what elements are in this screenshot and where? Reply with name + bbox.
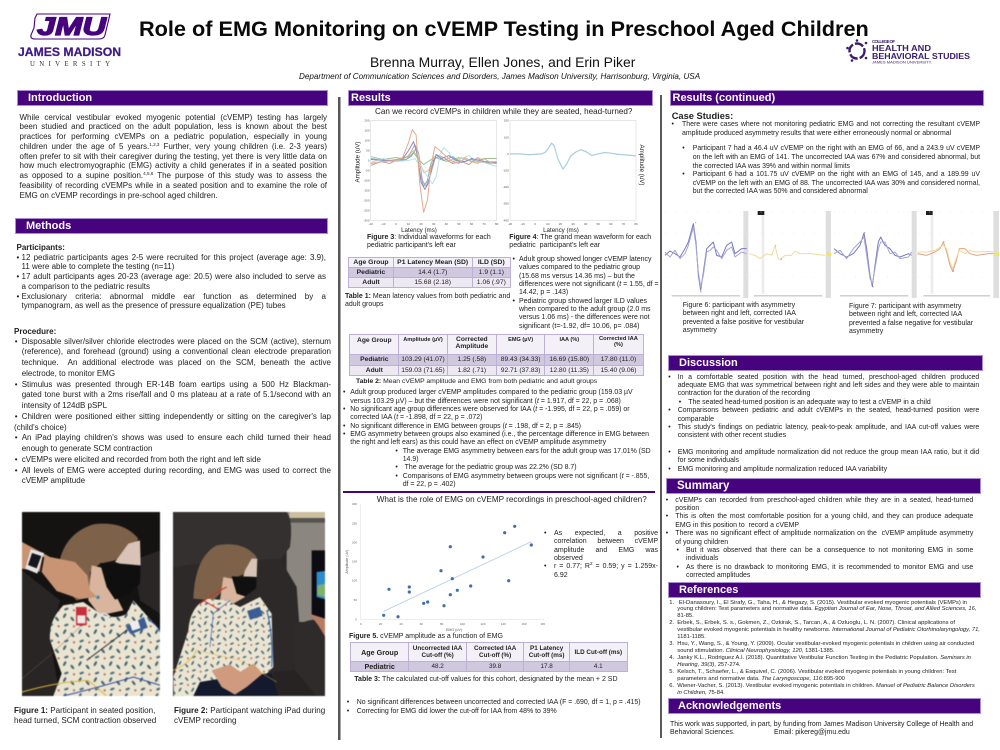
bullets: case studies: amplitude produced asymmetry results that were either erroneously normal or abnormal (682, 130, 951, 137)
table 2: amplitude and EMG: IAA (%) (559, 337, 579, 343)
bullets: summary: corrected amplitudes (686, 572, 750, 579)
table 1: latency: Pediatric (357, 269, 385, 276)
table 2: amplitude and EMG: 89.43 (34.33) (501, 356, 541, 363)
bullets: amplitude and EMG findings: No significant age group differences were observed for IAA (t = -1.995, df = 22, p = .059) or (350, 406, 630, 413)
chart: figures 6 and 7 case waveforms: N (872, 286, 874, 288)
text: procedure: gated tone burst with a 2ms rise/fall and 0 ms plateau at a rate of 5.1/second with an (22, 390, 331, 399)
chart: figure 4 grand mean waveform: Latency (ms) (543, 227, 579, 234)
caption: figure 3: Figure 3: Individual waveforms for each (367, 234, 491, 240)
bullets: summary: But it was observed that there can be a consequence to not monitoring EMG in some (686, 547, 973, 554)
bullets: summary: position (675, 505, 699, 512)
caption: figure 6: between right and left, corrected IAA (683, 310, 796, 317)
chart: figure 4 grand mean waveform: -400 (503, 218, 509, 222)
text: procedure: (reference), and forehead (ground) using a conventional clean electrode preparation (22, 347, 331, 356)
chart: figure 4 grand mean waveform: 30 (571, 222, 575, 226)
caption: table 2: Table 2: Mean cVEMP amplitude and EMG from both pediatric and adult groups (356, 378, 597, 384)
caption: figure 1 (14, 706, 156, 725)
heading: Methods (15, 218, 328, 234)
table 1: latency: P1 Latency Mean (SD) (397, 259, 468, 266)
bullets: summary: of young children (675, 539, 728, 546)
chart: figure 3 individual waveforms: 20 (419, 222, 423, 226)
chart: figure 5 scatter plot: 80 (440, 622, 444, 626)
text: references list: vestibular evoked myogenic potentials in healthy newborns. International Journal of Pediatric Otorhinolaryngology, 71, (677, 627, 980, 633)
chart: figure 5 scatter plot: 60 (420, 622, 423, 626)
caption: figure 2: cVEMP recording (174, 716, 236, 725)
chart: figure 3 individual waveforms: 0 (395, 222, 397, 226)
bullets: discussion: adequate EMG that was symmetrical between right and left sides and they were able to maintain (678, 382, 979, 389)
table 2: amplitude and EMG: 16.69 (15.80) (549, 356, 589, 363)
caption: figure 4 (509, 234, 651, 249)
chart: figure 3 individual waveforms: 200 (364, 119, 370, 123)
chart: figure 3 individual waveforms: -10 (381, 222, 386, 226)
table 3: cut-off values: Age Group (361, 648, 398, 657)
bullets: discussion: comparable (678, 416, 714, 423)
heading: Discussion: Discussion (679, 357, 738, 369)
text: acknowledgements: This work was supported, in part, by funding from James Madison University College of Health and (670, 721, 973, 728)
text: references list: Janky K.L., Rodriguez A.I. (2018). Quantitative Vestibular Function Testing in the Pediatric Population. Seminars in (677, 655, 971, 661)
text: participants (16, 243, 326, 310)
text: introduction paragraph: feasibility of recording cVEMPs while in a seated position and to examine the role of (20, 181, 327, 190)
table 1: latency: Adult (362, 279, 380, 286)
table 1: latency: Age Group (353, 259, 389, 266)
heading: Results (348, 90, 653, 106)
caption: table 1: adult groups (345, 301, 384, 308)
text: participants: 11 were able to complete the testing (n=11) (22, 262, 174, 271)
bullets: case studies: the corrected IAA was 39% and within normal limits (693, 163, 850, 170)
chart: figure 3 individual waveforms: 150 (364, 129, 370, 133)
bullets: summary (666, 496, 974, 579)
bullets: latency and ILD findings: significant (t=-1.92, df= 10.06, p= .084) (519, 323, 639, 330)
chart: figure 3 individual waveforms: 80 (495, 222, 499, 226)
text: acknowledgements: Behavioral Sciences. (670, 729, 735, 736)
bullets: discussion: consistent with other recent studies (678, 432, 786, 439)
chart: figure 3 individual waveforms: -200 (363, 198, 370, 202)
table 2: amplitude and EMG: Amplitude (µV) (403, 337, 443, 343)
chart: figure 4 grand mean waveform: Amplitude (uV) (638, 145, 645, 185)
heading: Introduction (17, 90, 328, 106)
logo: College of Health and Behavioral Studies: JAMES MADISON UNIVERSITY. (872, 60, 932, 64)
bullets: amplitude and EMG findings: df = 22, p = .402) (403, 481, 456, 488)
table 2: amplitude and EMG: 1.82 (.71) (458, 367, 486, 374)
chart: figures 6 and 7 case waveforms: P (864, 232, 866, 234)
heading: Results continued: Results (continued) (672, 92, 775, 104)
text: acknowledgements: Email: pikereg@jmu.edu (774, 729, 850, 736)
bullets: correlation: 6.92 (554, 572, 568, 579)
logo: College of Health and Behavioral Studies: HEALTH AND (872, 44, 931, 53)
bullets: summary: individuals (686, 555, 718, 562)
bullets: latency and ILD findings: (15.68 ms versus 14.36 ms) – but the (519, 273, 635, 280)
caption: table 3: Table 3: The calculated cut-off values for this cohort, designated by the mean + 2 SD (354, 676, 618, 682)
table 1: latency (348, 257, 511, 288)
affiliation: Department of Communication Sciences and Disorders, James Madison University, Harrisonburg, Virginia, USA (299, 72, 700, 81)
chart: figures 6 and 7 case waveforms: N (781, 259, 783, 261)
text: references list: 1181-1185. (677, 634, 706, 640)
table 2: amplitude and EMG: 1.25 (.58) (458, 356, 486, 363)
chart: figure 4 grand mean waveform: 50 (597, 222, 600, 226)
question: seated head-turned: Can we record cVEMPs in children while they are seated, head-turned? (375, 107, 632, 116)
caption: figure 4: Figure 4: The grand mean waveform for each (509, 234, 651, 240)
heading: Case Studies: Case Studies: (672, 111, 733, 121)
bullets: latency and ILD findings: Pediatric group showed larger ILD values (519, 298, 647, 305)
table 1: latency: 14.4 (1.7) (418, 269, 447, 276)
chart: figure 4 grand mean waveform: 60 (609, 222, 613, 226)
table 3: cut-off values: 17.8 (540, 663, 553, 670)
bullets: discussion: In a comfortable seated position with the head turned, preschool-aged children produced (678, 374, 979, 381)
logo: College of Health and Behavioral Studies: BEHAVIORAL STUDIES (872, 52, 971, 61)
chart: figure 3 individual waveforms: -20 (369, 222, 373, 226)
chart: figure 5 scatter plot: 100 (460, 622, 465, 626)
table 1: latency: ILD (SD) (478, 259, 505, 266)
caption: figure 7 (849, 302, 973, 335)
text: 3. (669, 641, 674, 647)
bullets: discussion: Comparisons between pediatric and adult cVEMPs in the seated, head-turned position were (678, 407, 979, 414)
logo: JMU James Madison University: UNIVERSITY (30, 61, 110, 68)
bullets: amplitude and EMG findings: The average EMG asymmetry between ears for the adult group was 17.01% (SD (403, 448, 651, 455)
text: introduction paragraph: often prefer to sit with their caregiver during the testing, yet there is very little data on (20, 152, 327, 160)
chart: figure 4 grand mean waveform: -20 (508, 222, 512, 226)
bullets: case studies: Participant 6 had a 101.75 uV cVEMP on the right with an EMG of 145, and a 189.99 uV (693, 171, 980, 178)
chart: figure 5 scatter plot: 20 (379, 622, 383, 626)
text: references list: Hsu, Y., Wang, S., & Young, Y. (2009). Ocular vestibular-evoked myogenic potentials in children using air conducted (677, 641, 974, 647)
caption: figure 2 (174, 706, 325, 725)
text: introduction paragraph: how much electromyographic (EMG) activity a child generates if in a seated position (20, 161, 327, 170)
bullets: latency and ILD findings (512, 256, 659, 330)
bullets: case studies (672, 120, 980, 195)
text: references list: Erbek, S., Erbek, S. s., Gokmen, Z., Ozkirak, S., Tarcan, A., & Ozluoglu, L. N. (2007). Clinical applications of (677, 620, 955, 626)
text: procedure: technique. An additional electrode was placed on the SCM, beneath the active (22, 358, 331, 367)
chart: figures 6 and 7 case waveforms: N (953, 271, 955, 273)
table 3: cut-off values: 4.1 (594, 663, 603, 670)
table 2: amplitude and EMG: 12.80 (11.35) (550, 367, 589, 374)
chart: figure 4 grand mean waveform: -100 (503, 168, 509, 172)
table 3: cut-off values (350, 642, 628, 672)
table 2: amplitude and EMG: 92.71 (37.83) (501, 367, 541, 374)
caption: table 1: Table 1: Mean latency values from both pediatric and (345, 292, 510, 300)
bullets: amplitude and EMG findings: Comparisons of EMG asymmetry between groups were not significant (t = -.855, (403, 473, 649, 480)
text: procedure: intensity of 124dB pSPL (22, 401, 107, 410)
heading: Summary (666, 478, 981, 494)
bullets: latency and ILD findings: when compared to the adult group (2.0 ms (519, 306, 651, 313)
bullets: correlation: amplitude and EMG was (554, 547, 658, 554)
text: 6. (669, 683, 674, 689)
text: procedure: Disposable silver/silver chloride electrodes were placed on the SCM (active), sternum (22, 336, 331, 346)
caption: figure 7: prevented a false negative for vestibular (849, 320, 973, 327)
text: references list: Hearing, 39(3), 257-274. (677, 662, 741, 668)
bullets: amplitude and EMG findings: the right and left ears) as this could have an effect on cVEMP amplitude asymmetry (350, 439, 606, 446)
chart: figure 3 individual waveforms: -300 (363, 218, 370, 222)
chart: figure 3 individual waveforms (354, 119, 499, 234)
bullets: amplitude and EMG findings: No significant difference in EMG between groups (t = .198, df = 2, p = .845) (350, 423, 581, 430)
photo: figure 1 participant seated, head turned (21, 511, 161, 697)
chart: figure 4 grand mean waveform: -200 (503, 185, 509, 189)
text: references list: in Children, 75-84. (677, 690, 725, 696)
table 3: cut-off values: ILD Cut-off (ms) (575, 649, 622, 656)
chart: figure 3 individual waveforms: Amplitude (uV) (354, 142, 362, 182)
chart: figure 4 grand mean waveform: 0 (507, 152, 509, 156)
bullets: discussion: contraction for the duration of the recording (678, 390, 810, 397)
logo: College of Health and Behavioral Studies (846, 39, 971, 64)
chart: figure 4 grand mean waveform: 70 (622, 222, 625, 226)
bullets: discussion: EMG monitoring and amplitude normalization did not reduce the group mean IAA ratio, but it did (678, 449, 979, 456)
chart: figure 3 individual waveforms: 100 (364, 139, 370, 143)
bullets: latency and ILD findings: 14.42, p = .143) (519, 289, 568, 296)
chart: figure 5 scatter plot: 0 (360, 622, 362, 626)
text: introduction paragraph: children under the age of 5 years.1,2,3 Further, very young children (i.e. 2-3 years) (20, 142, 327, 151)
table 2: amplitude and EMG (349, 334, 644, 376)
chart: figure 5 scatter plot: 160 (521, 622, 527, 626)
text: procedure: cVEMPs were elicited and recorded from both the right and left side (22, 455, 261, 464)
chart: figure 5 scatter plot (345, 502, 545, 632)
chart: figure 3 individual waveforms: -50 (365, 168, 370, 172)
logo: JMU James Madison University: JMU (37, 13, 107, 41)
heading: Acknowledgements (668, 698, 981, 714)
text: references list: Kelsch, T., Schaefer, L., & Esquivel, C. (2006). Vestibular evoked myogenic potentials in young children: Test (677, 669, 956, 675)
text: references list: Wiener-Vacher, S. (2013). Vestibular evoked myogenic potentials in children. Manuel of Pediatric Balance Disorders (677, 683, 975, 689)
table 2: amplitude and EMG: 159.03 (71.65) (401, 367, 445, 374)
question: role of EMG: What is the role of EMG on cVEMP recordings in preschool-aged children? (377, 495, 647, 504)
chart: figure 3 individual waveforms: -250 (363, 208, 370, 212)
chart: figure 3 individual waveforms: 0 (368, 158, 370, 162)
table 2: amplitude and EMG: 15.40 (9.06) (600, 367, 637, 374)
chart: figure 3 individual waveforms: -150 (363, 188, 370, 192)
text: introduction paragraph: EMG on cVEMP recordings in pre-school aged children. (20, 190, 218, 200)
caption: figure 1: head turned, SCM contraction observed (14, 716, 156, 725)
bullets: correlation: r = 0.77; R2 = 0.59; y = 1.259x- (554, 561, 658, 570)
chart: figure 4 grand mean waveform: -300 (503, 202, 509, 206)
table 2: amplitude and EMG: EMG (µV) (508, 337, 533, 343)
heading: References (668, 582, 981, 598)
chart: figures 6 and 7 case waveforms (665, 211, 999, 298)
heading: Results: Results (351, 92, 391, 104)
text: references list: 81-85. (677, 613, 694, 619)
bullets: IAA correction: No significant differences between uncorrected and corrected IAA (F = .690, df = 1, p = .415) (357, 699, 641, 706)
text: 4. (669, 655, 674, 661)
bullets: summary: EMG in this position to record a cVEMP (675, 522, 799, 529)
chart: figure 5 scatter plot: 250 (352, 521, 357, 525)
chart: figure 5 scatter plot: 50 (354, 598, 357, 602)
chart: figure 4 grand mean waveform: 40 (584, 222, 588, 226)
chart: figure 5 scatter plot: 200 (352, 540, 357, 544)
chart: figure 3 individual waveforms: 10 (407, 222, 410, 226)
logo: College of Health and Behavioral Studies: COLLEGE OF (872, 39, 895, 44)
chart: figures 6 and 7 case waveforms: N (700, 291, 702, 293)
table 2: amplitude and EMG: 17.80 (11.0) (601, 356, 636, 363)
bullets: case studies: but the corrected IAA was 50% and considered abnormal (693, 188, 868, 195)
text: procedure: (child's choice) (14, 422, 67, 432)
bullets: amplitude and EMG findings (343, 388, 651, 488)
table 3: cut-off values: 48.2 (432, 663, 444, 670)
caption: figure 1: Figure 1: Participant in seated position, (14, 706, 155, 715)
text: procedure: Stimulus was presented through ER-14B foam eartips using a 500 Hz Blackman- (22, 380, 331, 388)
table 3: cut-off values: P1 Latency Cut-off (ms) (529, 645, 564, 659)
bullets: amplitude and EMG findings: versus 103.29 µV) – but the differences were not significant (t = 1.917, df = 22, p = .068) (350, 398, 621, 405)
text: procedure: An iPad playing children's shows was used to ensure each child turned their head (22, 433, 331, 442)
chart: figure 4 grand mean waveform (502, 119, 645, 234)
bullets: correlation: observed (554, 555, 583, 562)
caption: figure 5: Figure 5. cVEMP amplitude as a function of EMG (349, 632, 503, 640)
logo: JMU James Madison University (18, 13, 121, 68)
text: references list: parameters and normative data. The Laryngoscope, 116:895-900 (677, 676, 845, 682)
bullets: discussion: EMG monitoring and amplitude normalization reduced IAA variability (678, 466, 887, 473)
bullets: case studies: There were cases where not monitoring pediatric EMG and not correcting the resultant cVEMP (682, 121, 980, 128)
text: participants: Participants: (16, 243, 65, 252)
chart: figure 3 individual waveforms: Latency (ms) (401, 227, 437, 234)
chart: figure 3 individual waveforms: 30 (432, 222, 436, 226)
table 1: latency: 1.06 (.97) (477, 279, 506, 286)
bullets: amplitude and EMG findings: corrected IAA (t = -1.898, df = 22, p = .072) (350, 414, 482, 421)
text: 1. (669, 600, 674, 606)
text: acknowledgements (670, 720, 973, 736)
table 3: cut-off values: 39.8 (489, 663, 501, 670)
chart: figure 4 grand mean waveform: 20 (559, 222, 562, 226)
text: 2. (669, 620, 674, 626)
text: participants: Exclusionary criteria: abnormal middle ear function as determined by a (22, 292, 326, 301)
caption: figure 3 (367, 234, 491, 249)
chart: figure 3 individual waveforms: 70 (482, 222, 486, 226)
table 2: amplitude and EMG: Pediatric (360, 356, 388, 363)
caption: figure 7: Figure 7: participant with asymmetry (849, 302, 961, 310)
caption: figure 6: prevented a false positive for vestibular (683, 319, 804, 326)
table 3: cut-off values: Corrected IAA Cut-off (%) (474, 645, 516, 659)
bullets: latency and ILD findings: differences were not significant (t = 1.55, df = (519, 281, 659, 288)
title: Role of EMG Monitoring on cVEMP Testing in Preschool Aged Children (139, 16, 869, 41)
bullets: latency and ILD findings: Adult group showed longer cVEMP latency (519, 256, 652, 263)
caption: figure 2: Figure 2: Participant watching iPad during (174, 706, 325, 715)
text: introduction paragraph: as opposed to a supine position.4,5,6 The purpose of this study was to assess the (20, 171, 327, 180)
text: procedure: enough to generate SCM contraction (22, 444, 152, 453)
chart: figure 3 individual waveforms: 50 (457, 222, 461, 226)
text: procedure: cVEMP amplitude (22, 476, 85, 485)
bullets: summary: As there is no drawback to monitoring EMG, it is recommended to monitor EMG and use (686, 564, 973, 571)
text: introduction paragraph: While cervical vestibular evoked myogenic potential (cVEMP) testing has largely (20, 112, 327, 122)
text: procedure: electrode, to monitor EMG (22, 369, 115, 378)
caption: figure 7: asymmetry (849, 328, 883, 335)
text: references list: young children: Test parameters and normative data. Egyptian Journal of Ear, Nose, Throat, and Allied Sciences, 16, (677, 606, 976, 612)
caption: figure 6: Figure 6: participant with asymmetry (683, 302, 795, 309)
table 2: amplitude and EMG: Corrected IAA (%) (599, 336, 638, 348)
bullets: IAA correction (347, 698, 641, 715)
heading: Discussion (668, 355, 983, 370)
table 3: cut-off values: Pediatric (364, 662, 395, 671)
text: participants: tympanogram, as well as the presence of pressure equalization (PE) tubes (22, 301, 286, 310)
bullets: discussion: This study's findings on pediatric latency, peak-to-peak amplitude, and IAA cut-off values were (678, 424, 979, 431)
text: introduction paragraph (20, 112, 327, 200)
chart: figure 5 scatter plot: 120 (480, 622, 486, 626)
chart: figure 5 scatter plot: 150 (352, 560, 357, 564)
chart: figure 5 scatter plot: EMG (uV) (446, 628, 462, 632)
chart: figure 5 scatter plot: 140 (501, 622, 506, 626)
bullets: correlation (544, 530, 658, 579)
bullets: amplitude and EMG findings: 14.9) (403, 456, 419, 463)
chart: figure 3 individual waveforms: 40 (445, 222, 448, 226)
table 2: amplitude and EMG: 103.29 (41.07) (401, 356, 445, 363)
chart: figures 6 and 7 case waveforms: P (775, 245, 777, 247)
bullets: correlation: correlation between cVEMP (554, 538, 658, 545)
heading: Introduction: Introduction (28, 92, 92, 104)
bullets: latency and ILD findings: versus 1.06 ms) - the differences were not (519, 314, 650, 321)
chart: figure 5 scatter plot: Amplitude (uV) (345, 550, 349, 574)
text: procedure: Procedure: (14, 326, 56, 336)
text: participants: 17 adult participants ages 20-23 (average age: 20.5) were also included to serve as (22, 272, 326, 281)
bullets: IAA correction: Correcting for EMG did lower the cut-off for IAA from 48% to 39% (357, 708, 557, 715)
caption: figure 3: pediatric participant's left ear (367, 242, 456, 249)
chart: figures 6 and 7 case waveforms: P (943, 241, 945, 243)
chart: figures 6 and 7 case waveforms: P (695, 222, 697, 224)
bullets: summary: This is often the most comfortable position for a young child, and they can produce adequate (675, 513, 973, 520)
caption: figure 7: between right and left, corrected IAA (849, 311, 962, 318)
text: participants: a comparison to the pediatric results (22, 282, 150, 291)
logo: JMU James Madison University: JAMES MADISON (18, 45, 121, 59)
text: introduction paragraph: practices for performing cVEMPs on a pediatric population, especially in young (20, 132, 327, 141)
caption: table 1 (345, 292, 510, 308)
bullets: case studies: Participant 7 had a 46.4 uV cVEMP on the right with an EMG of 66, and a 243.9 uV cVEMP (693, 145, 980, 152)
chart: figure 4 grand mean waveform: 200 (504, 119, 509, 123)
bullets: discussion: for some individuals (678, 457, 739, 464)
chart: figure 3 individual waveforms: 60 (470, 222, 473, 226)
photo: figure 2 participant watching iPad (172, 511, 326, 697)
caption: figure 4: pediatric participant's left ear (509, 242, 600, 249)
text: references list (669, 600, 980, 696)
table 2: amplitude and EMG: Corrected Amplitude (455, 336, 488, 350)
chart: figure 3 individual waveforms: 50 (366, 149, 370, 153)
heading: Methods: Methods (26, 220, 71, 232)
bullets: case studies: on the left with an EMG of 141. The uncorrected IAA was 67% and considered abnormal, but (693, 154, 980, 161)
chart: figure 5 scatter plot: 100 (352, 579, 357, 583)
caption: figure 6: asymmetry (683, 327, 717, 334)
text: 5. (669, 669, 674, 675)
bullets: discussion: The seated head-turned position is an adequate way to test a cVEMP in a child (688, 399, 931, 406)
table 1: latency: 1.9 (1.1) (479, 269, 504, 276)
bullets: latency and ILD findings: values compared to the pediatric group (519, 264, 640, 271)
table 2: amplitude and EMG: Adult (366, 367, 383, 374)
table 2: amplitude and EMG: Age Group (357, 337, 392, 344)
chart: figure 4 grand mean waveform: 100 (504, 135, 509, 139)
chart: figure 4 grand mean waveform: 10 (546, 222, 550, 226)
bullets: case studies: cVEMP on the left with an EMG of 88. The uncorrected IAA was 30% and considered normal, (693, 180, 980, 187)
text: participants: 12 pediatric participants ages 2-5 were recruited for this project (average age: 3.9), (22, 253, 326, 262)
chart: figure 5 scatter plot: 40 (399, 622, 403, 626)
chart: figure 4 grand mean waveform: -10 (520, 222, 525, 226)
heading: References: References (679, 584, 738, 596)
text: procedure: Children were positioned either sitting independently or sitting on the caregiver's lap (22, 412, 331, 421)
chart: figure 3 individual waveforms: -100 (363, 178, 370, 182)
bullets: amplitude and EMG findings: EMG asymmetry between groups also examined (i.e., the percentage difference in EMG between (350, 431, 649, 438)
bullets: amplitude and EMG findings: Adult group produced larger cVEMP amplitudes compared to the pediatric group (159.03 µV (350, 389, 633, 396)
text: introduction paragraph: been studied and practiced on the adult population, less is known about the best (20, 122, 327, 131)
bullets: correlation: As expected, a positive (554, 530, 658, 537)
heading: Acknowledgements: Acknowledgements (678, 700, 781, 712)
table 3: cut-off values: Uncorrected IAA Cut-off (%) (413, 645, 462, 659)
chart: figure 4 grand mean waveform: 0 (534, 222, 536, 226)
bullets: summary: There was no significant effect of amplitude normalization on the cVEMP amplitude asymmetry (675, 530, 973, 537)
chart: figure 5 scatter plot: 0 (355, 617, 357, 621)
bullets: discussion (668, 374, 979, 473)
heading: Summary: Summary (677, 480, 729, 492)
bullets: summary: cVEMPs can recorded from preschool-aged children while they are in a seated, head-turned (675, 497, 973, 504)
heading: Results continued (670, 90, 984, 106)
text: references list: sound stimulation. Clinical Neurophysiology, 120, 1381-1385. (677, 648, 835, 654)
text: references list: El-Danasoury, I., El Sirafy, G., Taha, H., & Hegazy, S. (2015). Vestibular evoked myogenic potentials (VEMPs) in (679, 600, 967, 606)
chart: figure 5 scatter plot: 300 (352, 502, 357, 506)
bullets: amplitude and EMG findings: The average for the pediatric group was 22.2% (SD 8.7) (405, 464, 577, 471)
text: procedure: All levels of EMG were accepted during recording, and EMG was used to correct the (22, 466, 331, 474)
chart: figure 4 grand mean waveform: 80 (634, 222, 638, 226)
table 1: latency: 15.68 (2.18) (414, 279, 451, 286)
caption: figure 6 (683, 302, 804, 334)
authors: Brenna Murray, Ellen Jones, and Erin Piker (370, 54, 635, 70)
text: procedure (14, 326, 331, 485)
